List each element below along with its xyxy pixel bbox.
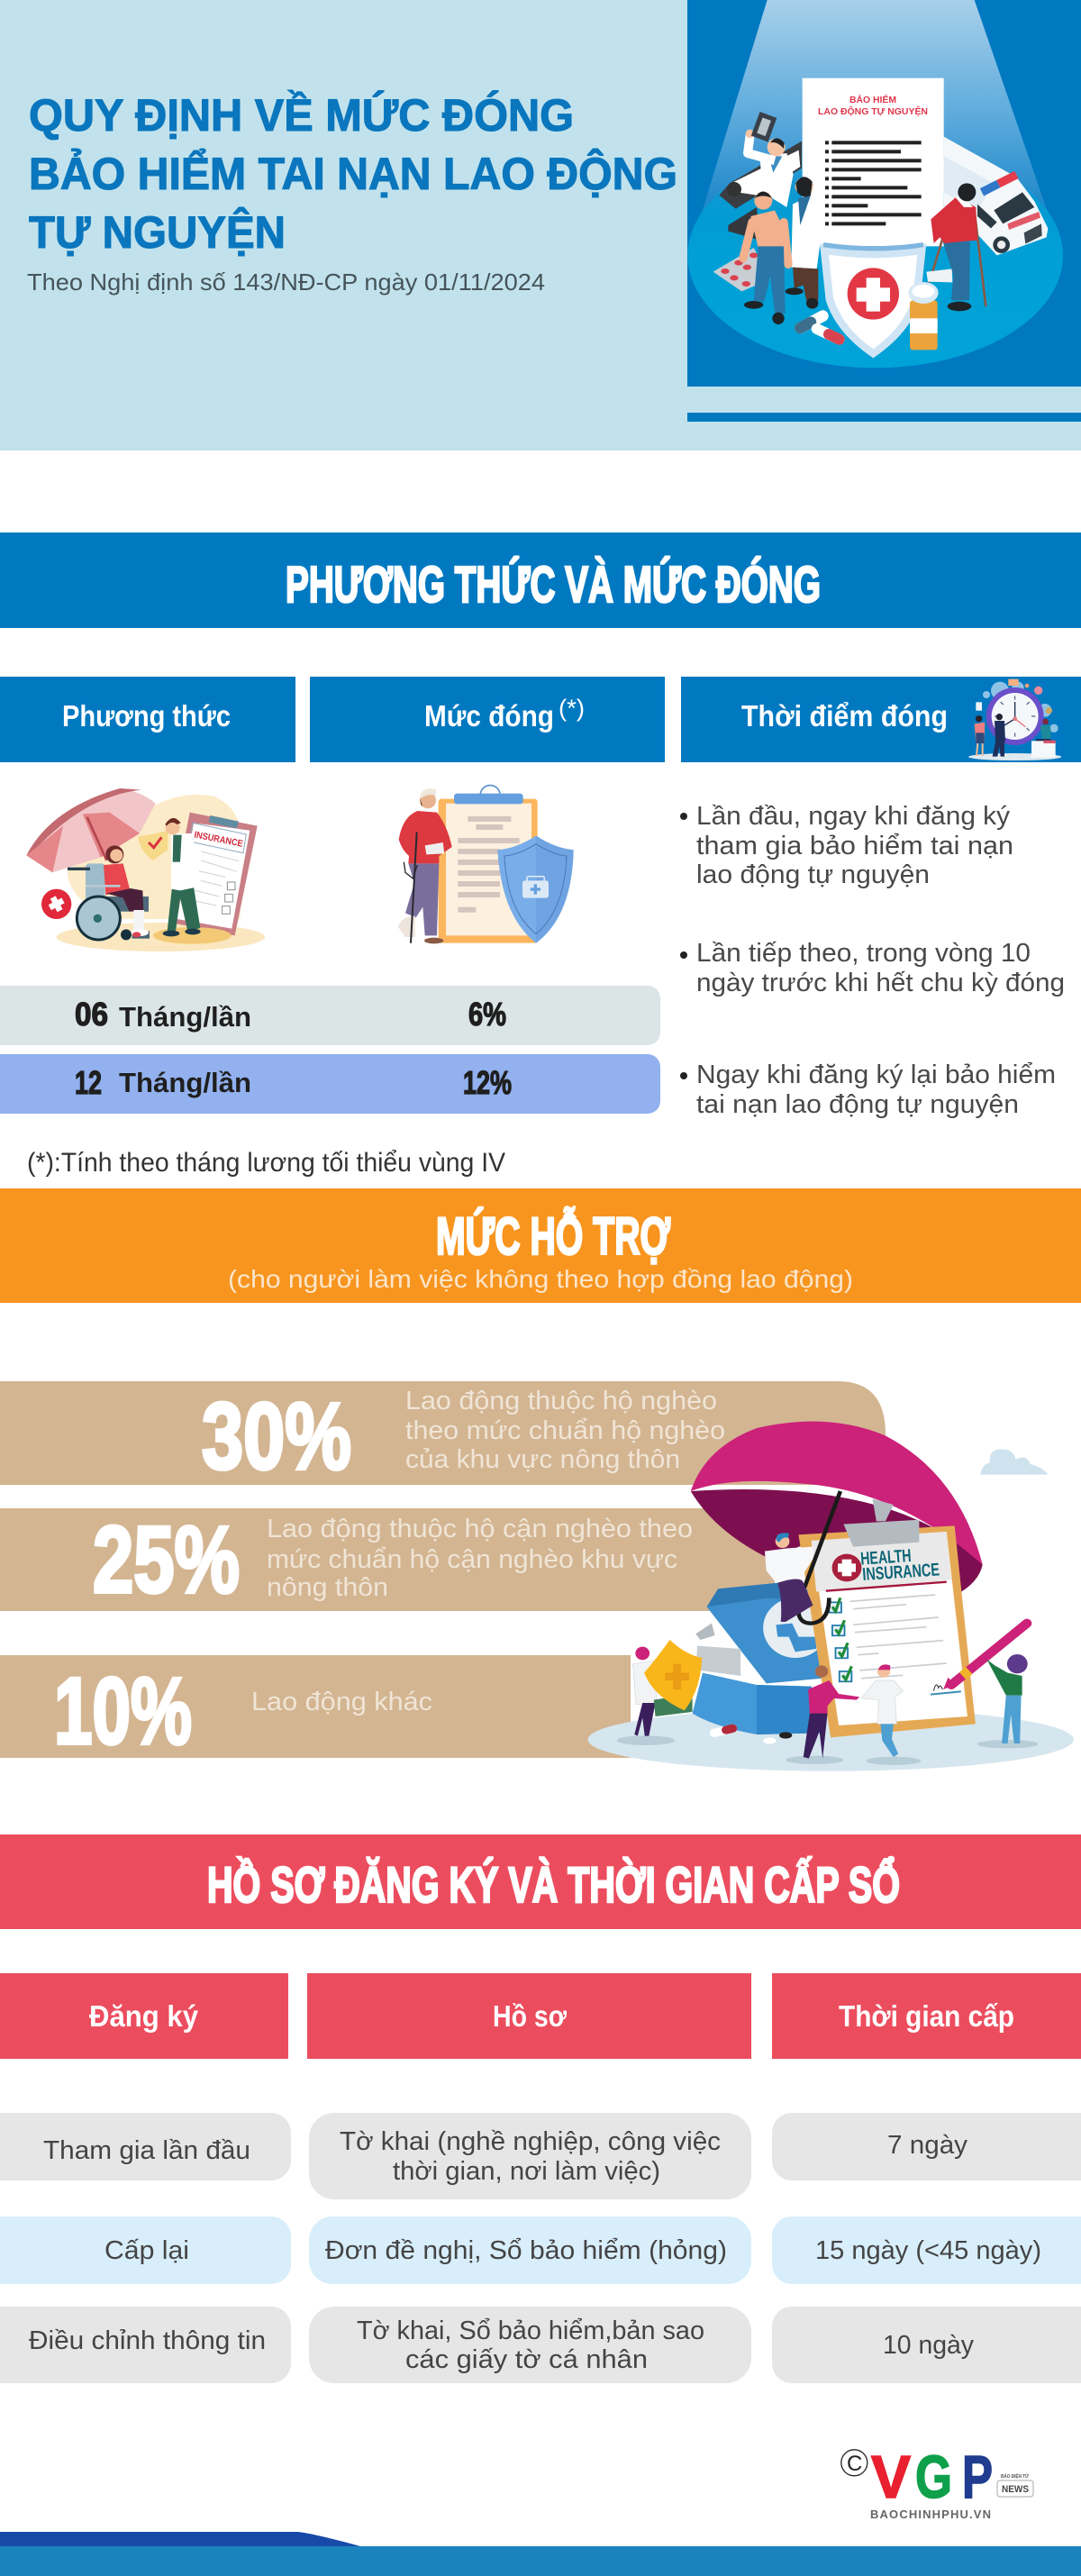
table header: hồ sơ: Hồ sơ [493, 1999, 567, 2033]
document heading: LAO ĐỘNG TỰ NGUYỆN [818, 105, 928, 117]
section heading band: phương thức và mức đóng: PHƯƠNG THỨC VÀ MỨC ĐÓNG [286, 556, 821, 614]
row: 12 tháng/lần: Tháng/lần [119, 1067, 251, 1098]
table header: thời gian cấp [772, 1973, 1081, 2059]
table header: thời điểm đóng: Thời điểm đóng [741, 699, 948, 733]
table header: thời điểm đóng [681, 677, 1081, 762]
bullet: đăng ký lại [680, 1060, 1056, 1119]
support bar: 10%: Lao động khác [251, 1688, 432, 1716]
table header: hồ sơ [307, 1973, 751, 2059]
document heading: BẢO HIỂM [849, 94, 896, 105]
label: health insurance: INSURANCE [862, 1560, 940, 1585]
bullet: đăng ký lại: tai nạn lao động tự nguyện [696, 1090, 1019, 1119]
illustration: wheelchair user with doctor and insurance clipboard [26, 788, 265, 951]
row: 06 tháng/lần: 06 [75, 996, 108, 1033]
panel: header [0, 0, 1081, 451]
bullet: đăng ký lại: Ngay khi đăng ký lại bảo hiểm [696, 1060, 1056, 1089]
logo: VGP news [841, 2444, 1033, 2521]
support bar: 10%: 10% [54, 1659, 192, 1764]
support bar: 25%: nông thôn [267, 1573, 388, 1602]
support bar: 30% [0, 1381, 886, 1489]
title: BẢO HIỂM TAI NẠN LAO ĐỘNG [29, 148, 677, 199]
row: 06 tháng/lần [0, 986, 660, 1045]
label: health insurance [859, 1546, 940, 1585]
logo: VGP news: NEWS [1002, 2484, 1029, 2495]
support bar: 30%: 30% [202, 1384, 351, 1489]
bullet: lần tiếp theo [680, 939, 1065, 997]
illustration: health insurance clipboard under umbrella [587, 1422, 1074, 1771]
table row: tham gia lần đầu: 7 ngày [887, 2131, 968, 2160]
title: TỰ NGUYỆN [29, 207, 286, 258]
table row: điều chỉnh thông tin: Tờ khai, Sổ bảo hiểm,bản sao [357, 2317, 704, 2345]
table header: đăng ký [0, 1973, 288, 2059]
section heading band: mức hỗ trợ: (cho người làm việc không theo hợp đồng lao động) [228, 1265, 853, 1293]
logo: VGP news: P [962, 2444, 993, 2511]
illustration: injured man with clipboard and shield [398, 786, 574, 943]
title: QUY ĐỊNH VỀ MỨC ĐÓNG [29, 90, 574, 141]
bullet list: thời điểm đóng [680, 802, 1065, 1119]
section heading band: mức hỗ trợ: MỨC HỖ TRỢ [436, 1207, 670, 1266]
section heading band: hồ sơ đăng ký [0, 1834, 1081, 1929]
table row: điều chỉnh thông tin: 10 ngày [883, 2331, 974, 2360]
table row: điều chỉnh thông tin: Điều chỉnh thông tin [29, 2326, 266, 2355]
table header: phương thức [0, 677, 295, 762]
row: 12 tháng/lần: 12 [75, 1064, 102, 1101]
section heading band: phương thức và mức đóng [0, 532, 1081, 628]
footnote: (*):Tính theo tháng lương tối thiểu vùng IV [27, 1148, 505, 1178]
table header: thời gian cấp: Thời gian cấp [839, 1999, 1014, 2033]
support bar: 25% [0, 1507, 775, 1613]
label: insurance: INSURANCE [193, 830, 244, 850]
logo: VGP news: G [915, 2444, 952, 2511]
bullet: lần đầu [680, 802, 1013, 889]
table row: điều chỉnh thông tin: các giấy tờ cá nhân [405, 2345, 648, 2374]
table header: mức đóng: Mức đóng [424, 699, 554, 733]
table row: cấp lại [0, 2216, 1081, 2284]
table header: phương thức: Phương thức [62, 699, 231, 733]
support bar: 30%: của khu vực nông thôn [405, 1445, 680, 1474]
table row: tham gia lần đầu [0, 2113, 1081, 2199]
table row: điều chỉnh thông tin [0, 2307, 1081, 2383]
bullet: lần tiếp theo: ngày trước khi hết chu kỳ đóng [696, 969, 1065, 997]
subtitle: Theo Nghị định số 143/NĐ-CP ngày 01/11/2024 [27, 269, 545, 296]
row: 12 tháng/lần [0, 1054, 660, 1114]
support bar: 10% [0, 1655, 631, 1764]
bullet: lần đầu: lao động tự nguyện [696, 860, 930, 889]
table header: mức đóng: (*) [559, 695, 585, 722]
row: 06 tháng/lần: Tháng/lần [119, 1001, 251, 1033]
logo: VGP news: BÁO ĐIỆN TỬ [1001, 2472, 1030, 2480]
support bar: 25%: 25% [93, 1507, 240, 1613]
table row: cấp lại: Đơn đề nghị, Sổ bảo hiểm (hỏng) [325, 2236, 727, 2265]
table row: cấp lại: 15 ngày (<45 ngày) [815, 2236, 1041, 2265]
table header: đăng ký: Đăng ký [89, 1999, 199, 2033]
document heading [818, 94, 928, 117]
table row: cấp lại: Cấp lại [104, 2236, 189, 2265]
table header: mức đóng [310, 677, 665, 762]
label: health insurance: HEALTH [859, 1546, 912, 1569]
support bar: 25%: Lao động thuộc hộ cận nghèo theo [267, 1515, 693, 1543]
logo: VGP news: C [847, 2452, 862, 2476]
bullet: lần đầu: tham gia bảo hiểm tai nạn [696, 832, 1013, 860]
logo: VGP news: V [871, 2444, 911, 2511]
support bar: 30%: Lao động thuộc hộ nghèo [405, 1387, 717, 1415]
table row: tham gia lần đầu: thời gian, nơi làm việc) [393, 2157, 660, 2186]
icon: clock with people [968, 679, 1061, 760]
bullet: lần tiếp theo: Lần tiếp theo, trong vòng 10 [696, 939, 1031, 968]
title [29, 90, 677, 258]
section heading band: mức hỗ trợ [0, 1188, 1081, 1303]
footer band [0, 2532, 1081, 2576]
illustration: insurance document with doctors and patients [687, 0, 1081, 422]
support bar: 25%: mức chuẩn hộ cận nghèo khu vực [267, 1545, 677, 1574]
support bar: 30%: theo mức chuẩn hộ nghèo [405, 1416, 725, 1445]
table row: tham gia lần đầu: Tham gia lần đầu [43, 2136, 250, 2165]
row: 12 tháng/lần: 12% [463, 1064, 512, 1101]
row: 06 tháng/lần: 6% [468, 996, 506, 1033]
bullet: lần đầu: Lần đầu, ngay khi đăng ký [696, 802, 1011, 831]
logo: VGP news: BAOCHINHPHU.VN [870, 2508, 991, 2521]
table row: tham gia lần đầu: Tờ khai (nghề nghiệp, công việc [340, 2127, 721, 2156]
